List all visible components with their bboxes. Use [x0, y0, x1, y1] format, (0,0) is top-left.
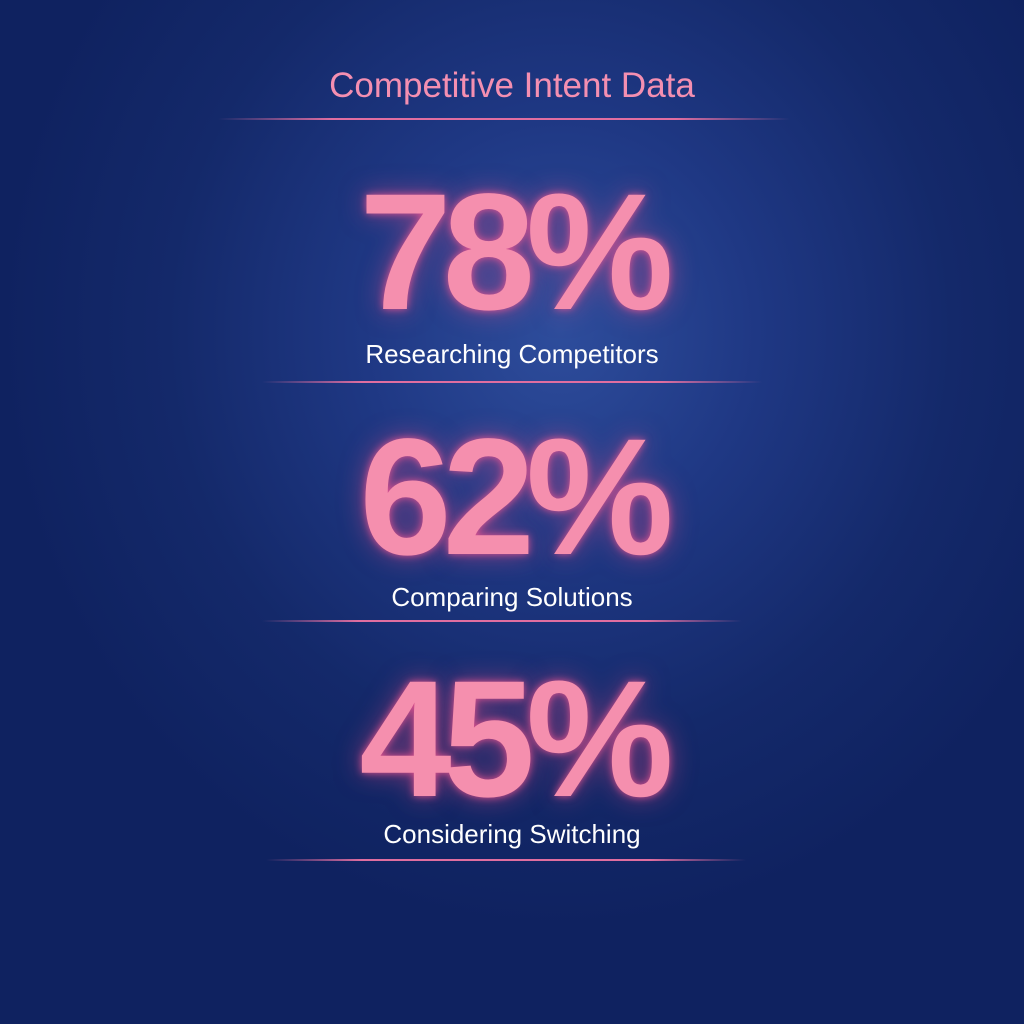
stat: 45%: 45%	[359, 647, 665, 832]
label: researching competitors: Researching Competitors	[365, 339, 659, 369]
title: Competitive Intent Data	[329, 66, 695, 105]
label: comparing solutions: Comparing Solutions	[391, 582, 633, 612]
stat: 78%: 78%	[359, 160, 665, 345]
stat: 62%: 62%	[359, 405, 665, 590]
label: considering switching: Considering Switching	[383, 819, 641, 849]
